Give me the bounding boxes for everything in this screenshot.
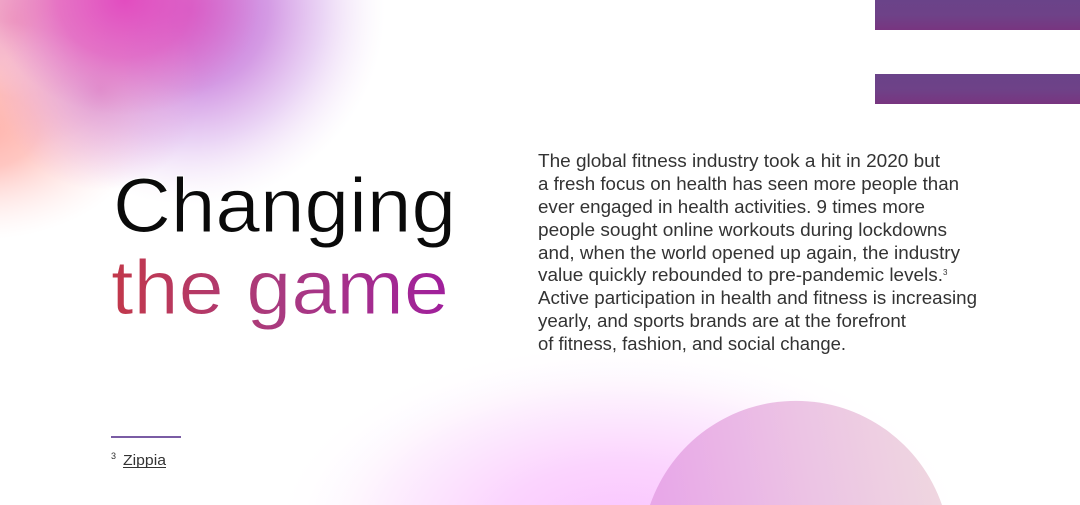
decorative circle [650,401,942,505]
top bar [875,0,1080,30]
body paragraph: value quickly rebounded to pre-pandemic levels. [538,265,943,285]
gradient glow: bottom [270,340,970,505]
body paragraph: 3 [943,268,948,277]
second bar [875,74,1080,104]
gradient blob: top left [0,0,390,240]
body paragraph: ever engaged in health activities. 9 times more [538,197,925,217]
footnote rule [111,436,181,438]
body paragraph: yearly, and sports brands are at the forefront [538,311,906,331]
title line: Changing: Changing [113,163,456,249]
body paragraph: and, when the world opened up again, the industry [538,243,960,263]
body paragraph: people sought online workouts during lockdowns [538,220,947,240]
footnote: Zippia [123,452,167,469]
body paragraph [538,151,977,354]
body paragraph: of fitness, fashion, and social change. [538,334,846,354]
title [111,163,456,331]
footnote: 3 [111,451,116,461]
title line: the game: the game [111,245,449,331]
body paragraph: a fresh focus on health has seen more people than [538,174,959,194]
body paragraph: Active participation in health and fitness is increasing [538,288,977,308]
footnote [111,451,167,469]
body paragraph: The global fitness industry took a hit in 2020 but [538,151,940,171]
